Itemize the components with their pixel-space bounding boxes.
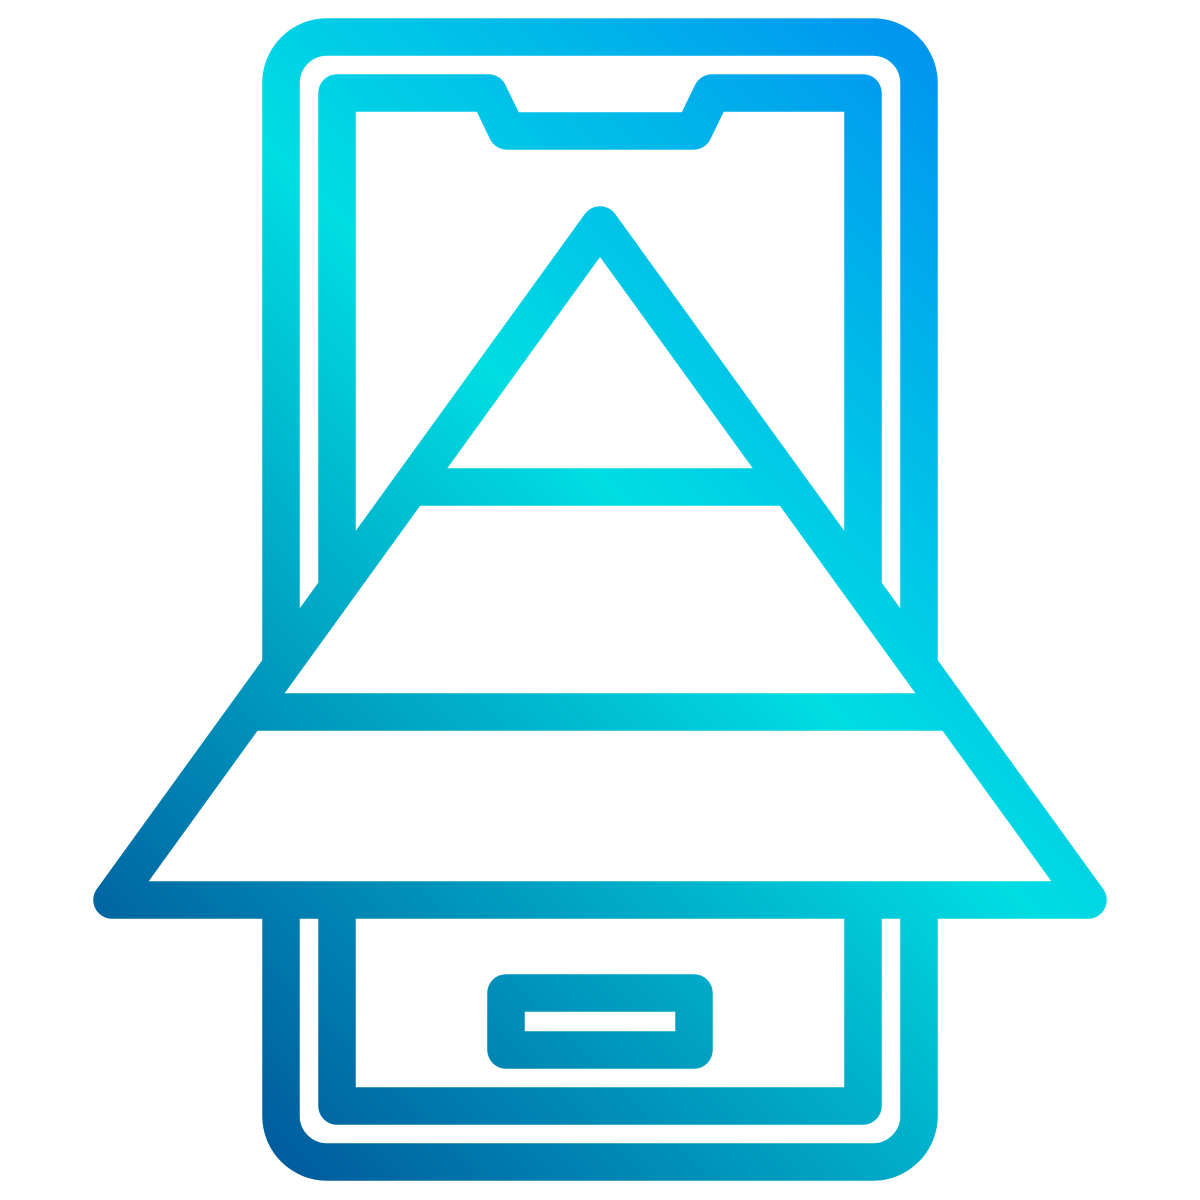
phone outer body bbox=[281, 37, 919, 1162]
home button bbox=[506, 993, 694, 1050]
phone screen with notch bbox=[337, 93, 863, 1106]
pyramid chart bbox=[112, 225, 1088, 900]
